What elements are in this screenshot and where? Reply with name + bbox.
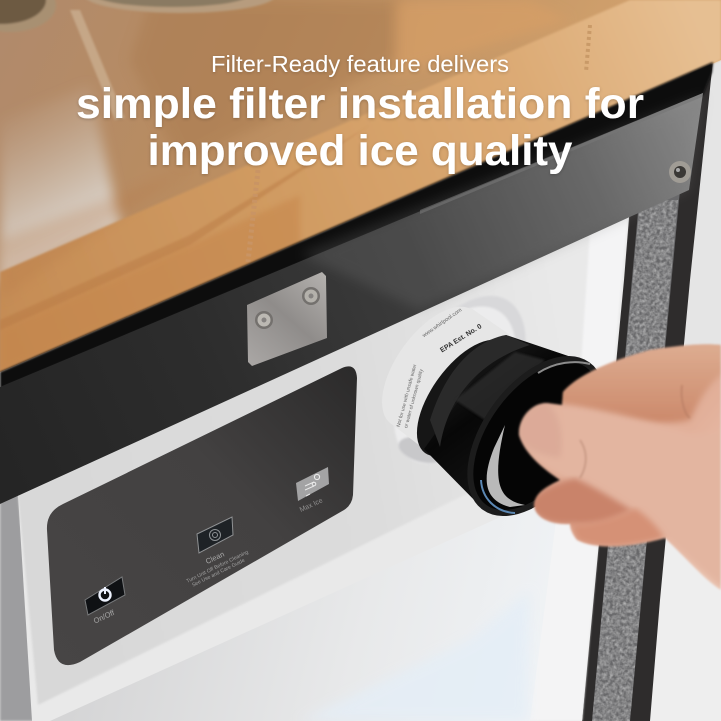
bar screw [669, 161, 691, 183]
white door frame [18, 205, 630, 721]
filter label text: Not for use with unsafe water [396, 363, 418, 428]
countertop front edge [0, 0, 721, 372]
metal latch plate [247, 272, 327, 366]
headline [76, 80, 644, 175]
control plate [18, 230, 590, 705]
countertop hazy reflection [0, 85, 120, 285]
filter label text: EPA Est. No. 0 [439, 323, 483, 354]
filter label text: or water of unknown quality [403, 368, 425, 429]
hand [516, 344, 721, 590]
fingertip [523, 408, 559, 454]
glass bases on the counter [0, 0, 276, 32]
metal bracket bar [0, 93, 703, 504]
shadow reflection [130, 0, 405, 165]
knuckle crease [580, 440, 586, 478]
label: clean: Clean [204, 550, 226, 566]
filter label text [396, 307, 483, 429]
label: clean instructions: See Use and Care Guide [191, 558, 246, 589]
label: max ice: Max Ice [299, 497, 324, 514]
black filter cartridge [398, 324, 628, 537]
light streak [70, 10, 125, 120]
control panel [47, 366, 357, 665]
white vertical trim [525, 208, 629, 721]
textured door gasket [592, 194, 680, 721]
filter label cylinder [363, 290, 510, 449]
wood countertop [0, 0, 721, 372]
black gap under counter [0, 62, 713, 389]
upper finger [555, 344, 721, 423]
label: clean instructions: Turn Unit Off Before Cleaning [186, 549, 250, 585]
headline: simple filter installation for [76, 80, 644, 128]
filter front ring [444, 335, 628, 537]
wood joint line [0, 125, 370, 330]
back of hand and fingers [519, 344, 721, 590]
index finger highlight [519, 403, 721, 590]
filter label text: www.whirlpool.com [421, 307, 464, 340]
subtitle: Filter-Ready feature delivers [211, 51, 509, 77]
button: on/off [85, 577, 125, 615]
headline: improved ice quality [148, 127, 573, 175]
filter housing opening [369, 274, 552, 484]
ice bin interior [50, 490, 560, 721]
button: clean [197, 517, 233, 553]
label: on/off: On/Off [92, 608, 117, 625]
lower fingers [530, 478, 632, 524]
button: max ice [296, 467, 329, 501]
left side strip [0, 490, 36, 721]
dark door column [582, 60, 713, 721]
